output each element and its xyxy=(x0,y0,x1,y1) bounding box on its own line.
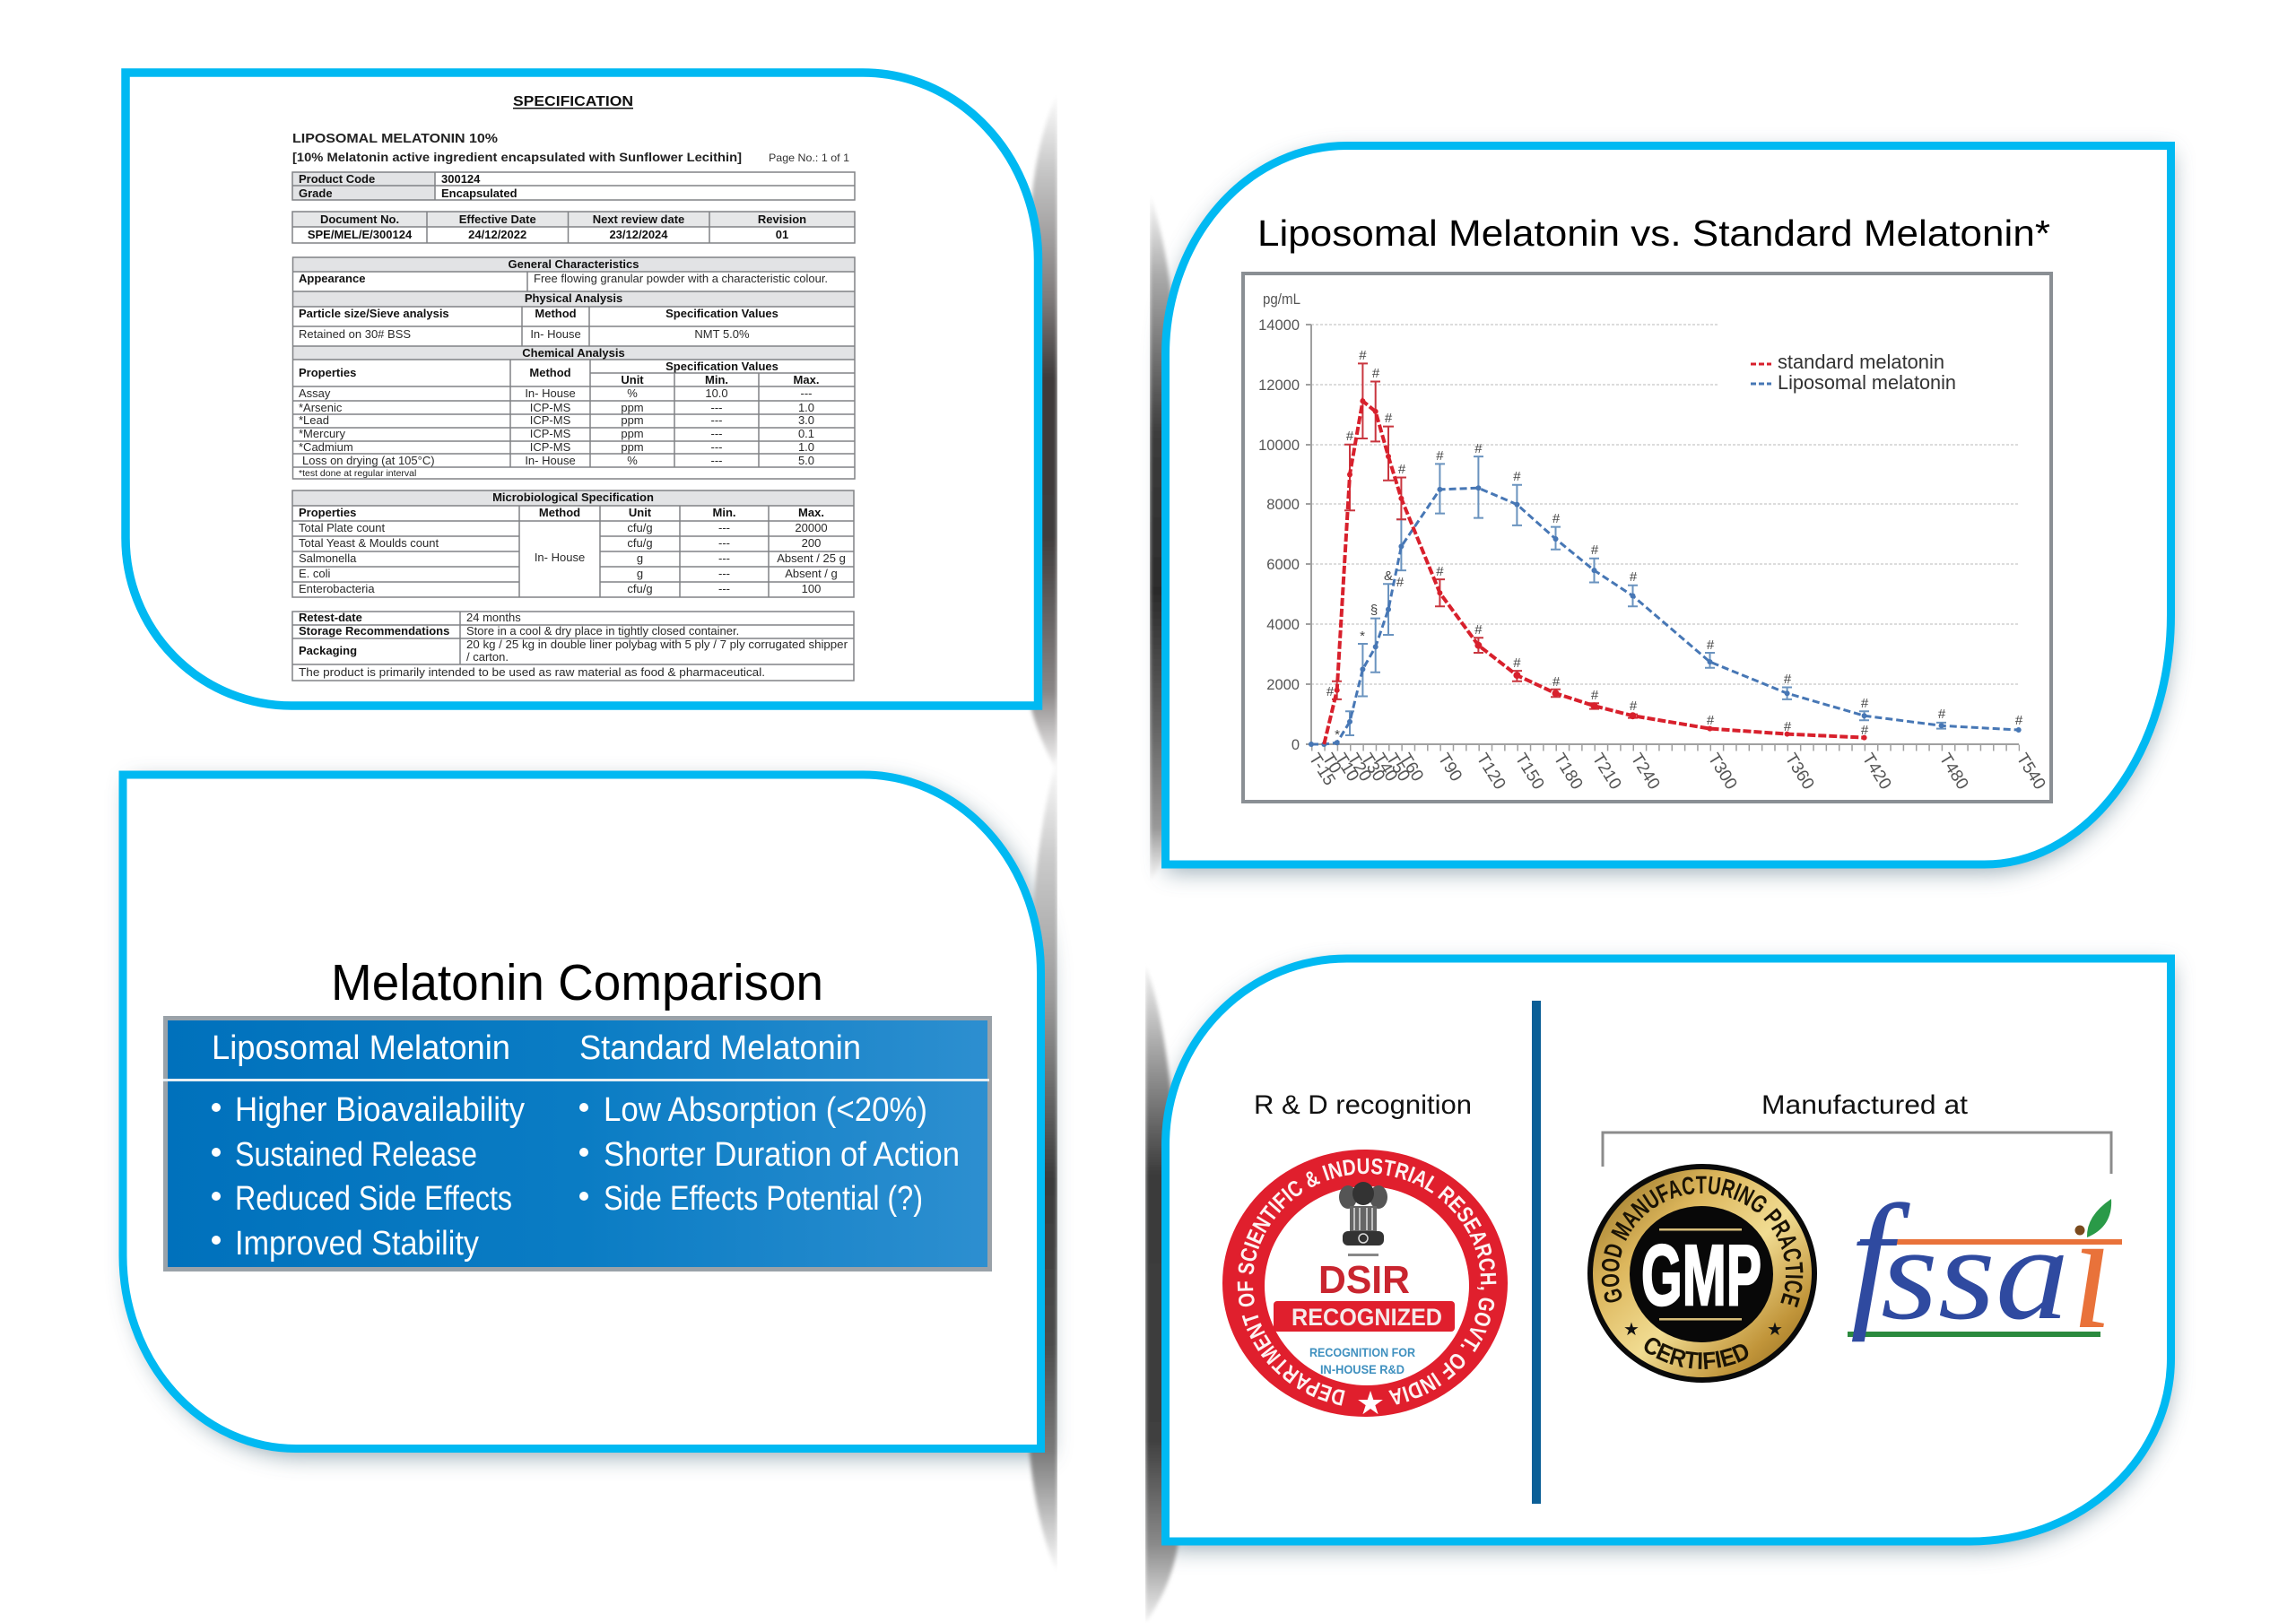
series: liposomal melatonin xyxy=(1309,456,2022,747)
comparison table xyxy=(163,1019,990,1270)
chart axes: T50 xyxy=(1382,751,1413,785)
column: liposomal melatonin: Improved Stability xyxy=(235,1225,479,1263)
spec table: microbiological: --- xyxy=(718,582,730,595)
significance markers: # xyxy=(1359,348,1367,363)
spec table: product: Grade xyxy=(299,187,333,200)
chart axes: T240 xyxy=(1627,751,1664,793)
spec table: product: Encapsulated xyxy=(441,187,517,200)
significance markers: # xyxy=(1372,366,1380,381)
spec table: microbiological xyxy=(292,490,854,597)
spec table: microbiological: g xyxy=(637,567,643,580)
spec table: microbiological: 100 xyxy=(802,582,821,595)
spec table: microbiological: Min. xyxy=(712,506,735,519)
heading: liposomal vs standard: Liposomal Melatonin vs. Standard Melatonin* xyxy=(1257,213,2050,254)
significance markers: # xyxy=(1861,696,1869,711)
spec table: characteristics and analysis: Appearance xyxy=(299,272,365,285)
spec table: characteristics and analysis: ppm xyxy=(621,440,644,454)
spec table: characteristics and analysis: 1.0 xyxy=(798,401,814,414)
significance markers: # xyxy=(1707,713,1715,728)
spec table: characteristics and analysis: General Characteristics xyxy=(509,257,639,271)
significance markers: # xyxy=(1784,672,1792,687)
spec table: characteristics and analysis: Method xyxy=(535,307,577,320)
spec heading: LIPOSOMAL MELATONIN 10% xyxy=(292,131,498,146)
spec table: characteristics and analysis: In- House xyxy=(530,327,581,341)
spec table: characteristics and analysis: Min. xyxy=(705,373,728,386)
significance markers: # xyxy=(1326,684,1335,699)
chart axes: 10000 xyxy=(1258,438,1300,454)
spec table: document: 24/12/2022 xyxy=(468,228,526,241)
significance markers: # xyxy=(1436,448,1444,464)
badge: GMP certified: CERTIFIED xyxy=(1645,1338,1749,1369)
significance markers: # xyxy=(1474,441,1483,456)
spec table: microbiological: --- xyxy=(718,536,730,550)
spec table: document: Document No. xyxy=(320,213,399,226)
panel: pharmacokinetic chart xyxy=(1165,145,2170,864)
spec table: microbiological: E. coli xyxy=(299,567,331,580)
spec table: microbiological: Total Yeast & Moulds count xyxy=(299,536,439,550)
spec heading xyxy=(292,94,849,164)
chart axes: T60 xyxy=(1396,751,1427,785)
spec table: storage: Retest-date xyxy=(299,611,362,624)
significance markers: # xyxy=(1707,638,1715,653)
spec table: characteristics and analysis: 3.0 xyxy=(798,413,814,427)
spec table: microbiological: Salmonella xyxy=(299,551,357,565)
spec table: characteristics and analysis xyxy=(292,257,855,479)
spec table: microbiological: 20000 xyxy=(795,521,828,534)
chart axes: T20 xyxy=(1344,751,1375,785)
spec table: microbiological: Absent / g xyxy=(785,567,838,580)
spec table: characteristics and analysis: ppm xyxy=(621,401,644,414)
panel frame: comparison xyxy=(123,775,1041,1449)
spec table: characteristics and analysis: --- xyxy=(800,386,813,400)
significance markers: # xyxy=(1552,674,1561,690)
badge: DSIR recognized: RECOGNITION FOR xyxy=(1309,1345,1415,1359)
panel frame: specification xyxy=(126,73,1039,706)
spec table: characteristics and analysis: Assay xyxy=(299,386,331,400)
spec table: microbiological: --- xyxy=(718,551,730,565)
chart axes: 12000 xyxy=(1258,378,1300,394)
spec table: microbiological: g xyxy=(637,551,643,565)
significance markers: # xyxy=(1938,707,1946,722)
spec table: characteristics and analysis: Loss on drying (at 105°C) xyxy=(302,454,435,467)
spec table: characteristics and analysis: Max. xyxy=(794,373,819,386)
spec table: document: 01 xyxy=(776,228,788,241)
chart axes: 6000 xyxy=(1266,557,1300,573)
spec table: characteristics and analysis: % xyxy=(627,386,638,400)
spec table: characteristics and analysis: *Cadmium xyxy=(299,440,353,454)
column: standard melatonin: Standard Melatonin xyxy=(579,1029,861,1067)
spec table: microbiological: 200 xyxy=(802,536,821,550)
badge: GMP certified: ★ xyxy=(1623,1320,1639,1340)
spec table: storage: 24 months xyxy=(466,611,521,624)
chart axes: T150 xyxy=(1511,751,1548,793)
significance markers: * xyxy=(1335,727,1340,742)
spec table: microbiological: In- House xyxy=(535,551,585,564)
column: liposomal melatonin: Sustained Release xyxy=(235,1136,477,1174)
spec table: storage: 20 kg / 25 kg in double liner polybag with 5 ply / 7 ply corrugated shipper xyxy=(466,638,848,651)
significance markers: # xyxy=(1591,688,1599,703)
significance markers: # xyxy=(2015,713,2023,728)
spec table: characteristics and analysis: 1.0 xyxy=(798,440,814,454)
heading: melatonin comparison: Melatonin Comparison xyxy=(331,954,823,1011)
spec table: characteristics and analysis: Chemical Analysis xyxy=(522,346,625,360)
significance markers: # xyxy=(1552,511,1561,526)
spec table: characteristics and analysis: ICP-MS xyxy=(530,401,571,414)
spec table: storage: Store in a cool & dry place in tightly closed container. xyxy=(466,624,739,638)
column: liposomal melatonin xyxy=(212,1029,525,1263)
spec table: microbiological: Max. xyxy=(798,506,824,519)
spec table: document xyxy=(292,212,855,243)
significance markers: § xyxy=(1370,603,1378,618)
badge: DSIR recognized: DEPARTMENT OF SCIENTIFIC & INDUSTRIAL RESEARCH, GOVT. OF INDIA xyxy=(1238,1159,1496,1406)
spec table: microbiological: cfu/g xyxy=(627,536,653,550)
chart axes: 4000 xyxy=(1266,617,1300,633)
logo: fssai xyxy=(1848,1174,2122,1365)
spec table: characteristics and analysis: In- House xyxy=(525,454,576,467)
spec table: storage xyxy=(292,611,854,681)
spec table: characteristics and analysis: Retained on 30# BSS xyxy=(299,327,411,341)
spec table: characteristics and analysis: *Mercury xyxy=(299,427,346,440)
significance markers xyxy=(1326,348,2023,742)
spec table: characteristics and analysis: 0.1 xyxy=(798,427,814,440)
significance markers: * xyxy=(1360,629,1365,644)
significance markers: # xyxy=(1398,462,1406,477)
spec table: characteristics and analysis: ICP-MS xyxy=(530,413,571,427)
significance markers: # xyxy=(1591,542,1599,558)
column: standard melatonin: Low Absorption (<20%) xyxy=(604,1091,927,1129)
spec table: product: Product Code xyxy=(299,172,375,186)
panel frame: certifications xyxy=(1166,959,2171,1541)
column: standard melatonin xyxy=(579,1029,960,1218)
significance markers: # xyxy=(1385,411,1393,426)
badge: GMP certified: GOOD MANUFACTURING PRACTICE xyxy=(1602,1176,1803,1307)
spec table: characteristics and analysis: ICP-MS xyxy=(530,427,571,440)
spec table: characteristics and analysis: ppm xyxy=(621,413,644,427)
badge: DSIR recognized: IN-HOUSE R&D xyxy=(1320,1362,1405,1376)
spec table: characteristics and analysis: Method xyxy=(529,366,571,379)
chart axes: 0 xyxy=(1292,737,1300,753)
spec table: microbiological: Method xyxy=(539,506,580,519)
spec table: microbiological: Microbiological Specification xyxy=(492,490,654,504)
spec table: microbiological: --- xyxy=(718,567,730,580)
chart axes xyxy=(1258,291,2049,793)
spec table: microbiological: cfu/g xyxy=(627,521,653,534)
badge: GMP certified: GMP xyxy=(1641,1228,1761,1324)
panel: specification sheet xyxy=(126,73,1039,706)
badge: GMP certified xyxy=(1587,1164,1817,1383)
chart axes: T90 xyxy=(1434,751,1465,785)
spec table: characteristics and analysis: 10.0 xyxy=(705,386,728,400)
significance markers: # xyxy=(1630,699,1638,714)
spec table: characteristics and analysis: *Arsenic xyxy=(299,401,343,414)
spec table: storage: Storage Recommendations xyxy=(299,624,449,638)
spec table: microbiological: Enterobacteria xyxy=(299,582,375,595)
spec table: characteristics and analysis: Specification Values xyxy=(665,360,778,373)
spec table: characteristics and analysis: % xyxy=(627,454,638,467)
spec table: characteristics and analysis: *test done at regular interval xyxy=(299,468,416,479)
spec table: characteristics and analysis: Physical Analysis xyxy=(525,291,622,305)
badge: DSIR recognized: ★ xyxy=(1356,1384,1385,1421)
significance markers: # xyxy=(1396,575,1405,590)
logo: fssai: f xyxy=(1850,1174,1910,1342)
spec table: microbiological: cfu/g xyxy=(627,582,653,595)
spec table: product: 300124 xyxy=(441,172,481,186)
spec table: characteristics and analysis: In- House xyxy=(525,386,576,400)
spec table: document: Effective Date xyxy=(459,213,536,226)
chart axes: T120 xyxy=(1473,751,1509,793)
series: standard melatonin xyxy=(1324,363,1867,744)
badge: DSIR recognized: DSIR xyxy=(1318,1258,1410,1302)
spec table: characteristics and analysis: Free flowing granular powder with a characteristic colour. xyxy=(534,272,828,285)
significance markers: # xyxy=(1784,719,1792,734)
significance markers: # xyxy=(1474,622,1483,638)
spec table: characteristics and analysis: Particle size/Sieve analysis xyxy=(299,307,449,320)
significance markers: & xyxy=(1384,568,1393,584)
significance markers: # xyxy=(1346,429,1354,444)
chart axes: T0 xyxy=(1318,751,1344,777)
chart axes: T40 xyxy=(1370,751,1401,785)
spec table: microbiological: Total Plate count xyxy=(299,521,386,534)
spec heading: SPECIFICATION xyxy=(513,94,633,109)
spec table: document: Next review date xyxy=(593,213,684,226)
spec table: characteristics and analysis: --- xyxy=(710,413,723,427)
chart axes: T420 xyxy=(1858,751,1895,793)
chart axes: pg/mL xyxy=(1263,291,1300,308)
chart legend: Liposomal melatonin xyxy=(1778,371,1956,394)
spec table: microbiological: Properties xyxy=(299,506,356,519)
chart axes: T480 xyxy=(1935,751,1972,793)
logo: fssai: ı xyxy=(2072,1176,2113,1365)
label: manufactured at: Manufactured at xyxy=(1761,1090,1969,1120)
spec table: microbiological: Absent / 25 g xyxy=(777,551,846,565)
spec table: characteristics and analysis: ppm xyxy=(621,427,644,440)
chart legend: standard melatonin xyxy=(1778,351,1944,373)
spec table: document: Revision xyxy=(758,213,806,226)
chart axes: T30 xyxy=(1357,751,1388,785)
line chart xyxy=(1243,273,2051,802)
spec table: document: 23/12/2024 xyxy=(609,228,668,241)
spec table: product xyxy=(292,172,855,200)
significance markers: # xyxy=(1861,723,1869,738)
panel frame: chart xyxy=(1165,145,2170,864)
chart axes: T300 xyxy=(1704,751,1741,793)
spec table: storage: Packaging xyxy=(299,644,357,657)
column: standard melatonin: Side Effects Potential (?) xyxy=(604,1180,923,1218)
chart axes: T540 xyxy=(2013,751,2049,793)
icon: national emblem xyxy=(1339,1182,1387,1256)
badge: DSIR recognized: RECOGNIZED xyxy=(1292,1304,1442,1331)
spec table: characteristics and analysis: 5.0 xyxy=(798,454,814,467)
chart axes: T10 xyxy=(1331,751,1362,785)
spec heading: Page No.: 1 of 1 xyxy=(769,152,849,164)
spec table: characteristics and analysis: *Lead xyxy=(299,413,329,427)
spec table: document: SPE/MEL/E/300124 xyxy=(308,228,413,241)
spec table: characteristics and analysis: ICP-MS xyxy=(530,440,571,454)
spec table: storage: The product is primarily intended to be used as raw material as food & pharmaceutical. xyxy=(299,665,765,679)
significance markers: # xyxy=(1436,564,1444,579)
spec table: characteristics and analysis: --- xyxy=(710,427,723,440)
chart axes: 2000 xyxy=(1266,677,1300,693)
column: liposomal melatonin: Reduced Side Effects xyxy=(235,1180,512,1218)
panel: certifications xyxy=(1161,954,2175,1546)
spec table: characteristics and analysis: --- xyxy=(710,454,723,467)
significance markers: # xyxy=(1513,655,1521,671)
chart axes: 14000 xyxy=(1258,317,1300,334)
spec table: characteristics and analysis: Unit xyxy=(621,373,644,386)
significance markers: # xyxy=(1513,469,1521,484)
spec table: characteristics and analysis: --- xyxy=(710,401,723,414)
chart legend xyxy=(1751,351,1956,394)
logo: fssai: ssa xyxy=(1881,1199,2069,1348)
chart axes: T-15 xyxy=(1305,751,1339,789)
label: R and D recognition: R & D recognition xyxy=(1254,1090,1472,1120)
vertical divider xyxy=(1532,1001,1541,1504)
chart axes: T360 xyxy=(1781,751,1818,793)
spec table: characteristics and analysis: NMT 5.0% xyxy=(694,327,750,341)
badge: GMP certified: ★ xyxy=(1767,1320,1783,1340)
column: liposomal melatonin: Higher Bioavailability xyxy=(235,1091,525,1129)
significance markers: # xyxy=(1630,569,1638,585)
spec table: microbiological: --- xyxy=(718,521,730,534)
chart axes: T210 xyxy=(1588,751,1625,793)
spec table: characteristics and analysis: Specification Values xyxy=(665,307,778,320)
spec heading: [10% Melatonin active ingredient encapsulated with Sunflower Lecithin] xyxy=(292,150,742,164)
column: standard melatonin: Shorter Duration of Action xyxy=(604,1136,960,1174)
spec table: microbiological: Unit xyxy=(629,506,652,519)
spec table: characteristics and analysis: --- xyxy=(710,440,723,454)
chart axes: T180 xyxy=(1550,751,1587,793)
spec table: storage: / carton. xyxy=(466,650,509,664)
panel: melatonin comparison xyxy=(123,775,1041,1449)
bracket xyxy=(1603,1133,2111,1174)
chart axes: 8000 xyxy=(1266,497,1300,513)
spec table: characteristics and analysis: Properties xyxy=(299,366,356,379)
column: liposomal melatonin: Liposomal Melatonin xyxy=(212,1029,510,1067)
